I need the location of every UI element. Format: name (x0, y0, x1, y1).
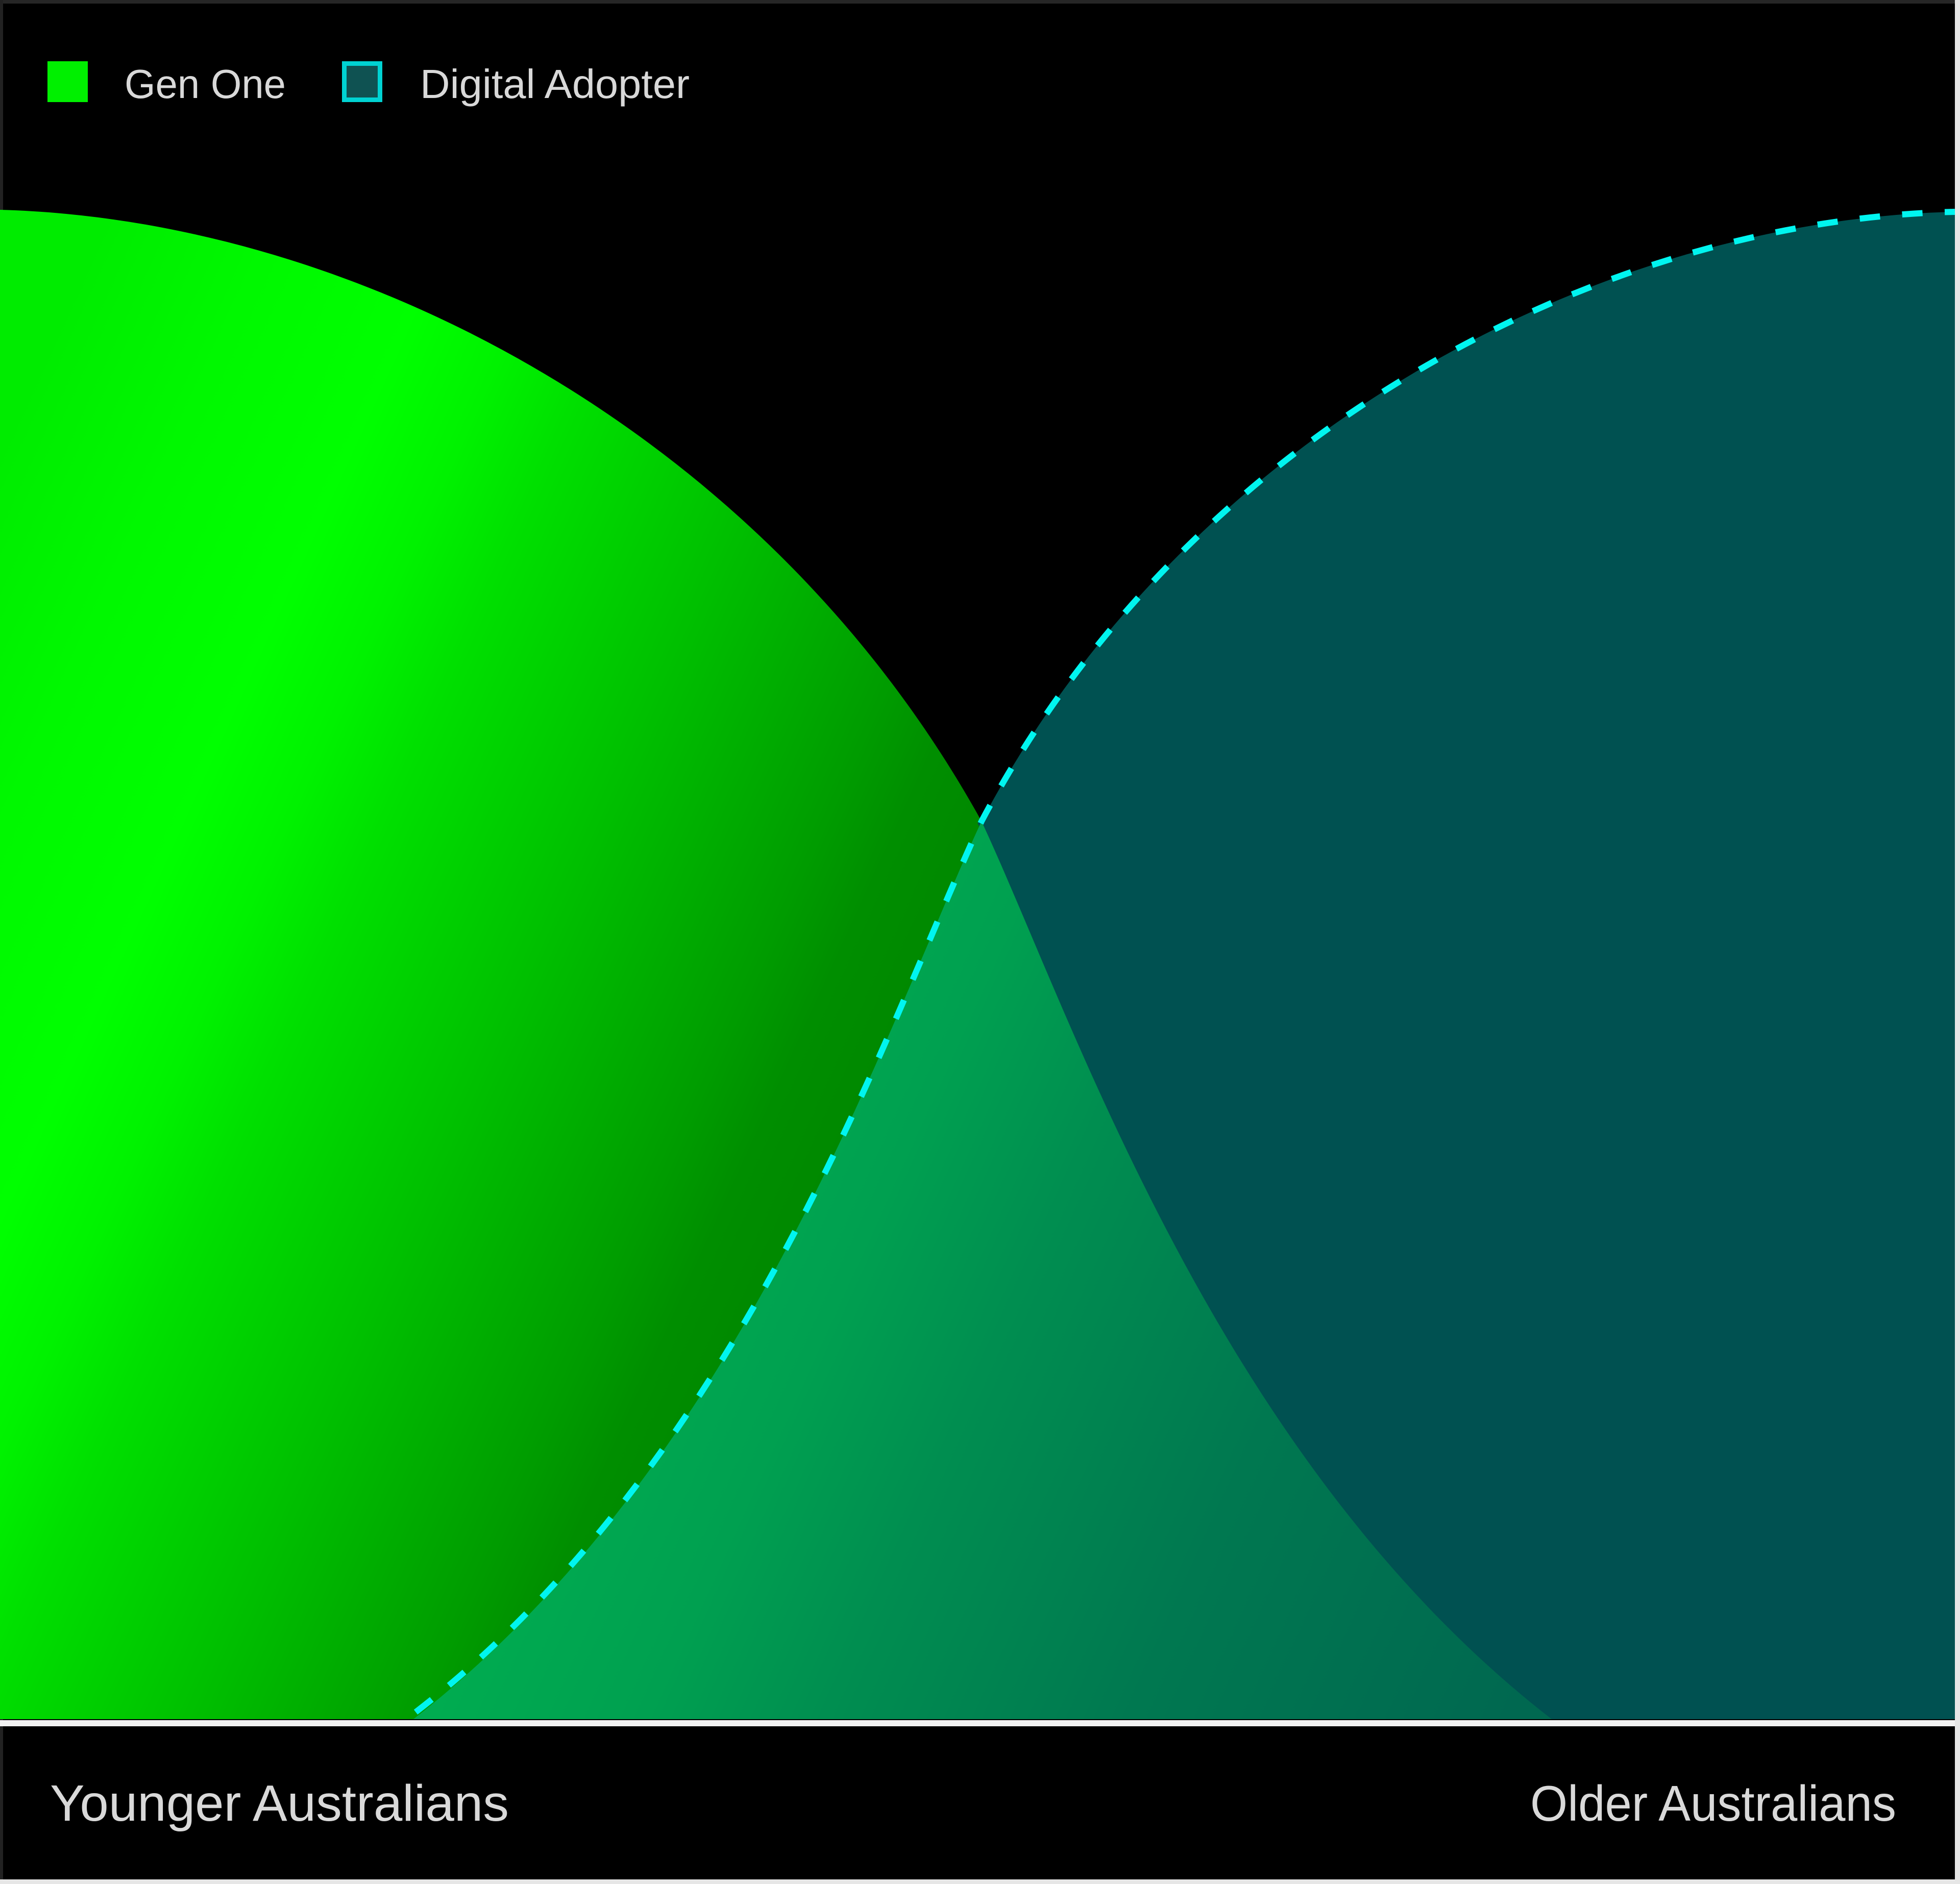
legend label: Digital Adopter: Digital Adopter (420, 61, 690, 107)
frame: faint left edge (0, 0, 3, 1879)
chart: overlapping adoption curves (0, 210, 1955, 1719)
frame: light bottom edge (0, 1879, 1960, 1884)
axis label: Older Australians: Older Australians (1530, 1775, 1896, 1831)
legend swatch: Digital Adopter (344, 63, 380, 100)
legend swatch: Gen One (47, 61, 88, 102)
area: Digital Adopter curve (977, 212, 1955, 1719)
legend label: Gen One: Gen One (125, 61, 286, 107)
area: Gen One curve (0, 210, 986, 1719)
frame: light right edge (1955, 0, 1960, 1884)
area: overlap of both curves (413, 821, 1552, 1719)
axis label: Younger Australians: Younger Australians (50, 1775, 509, 1832)
legend (47, 61, 690, 107)
dashed outline: Digital Adopter curve (412, 212, 1955, 1715)
x axis line (0, 1720, 1955, 1726)
frame: faint top edge (0, 0, 1960, 4)
